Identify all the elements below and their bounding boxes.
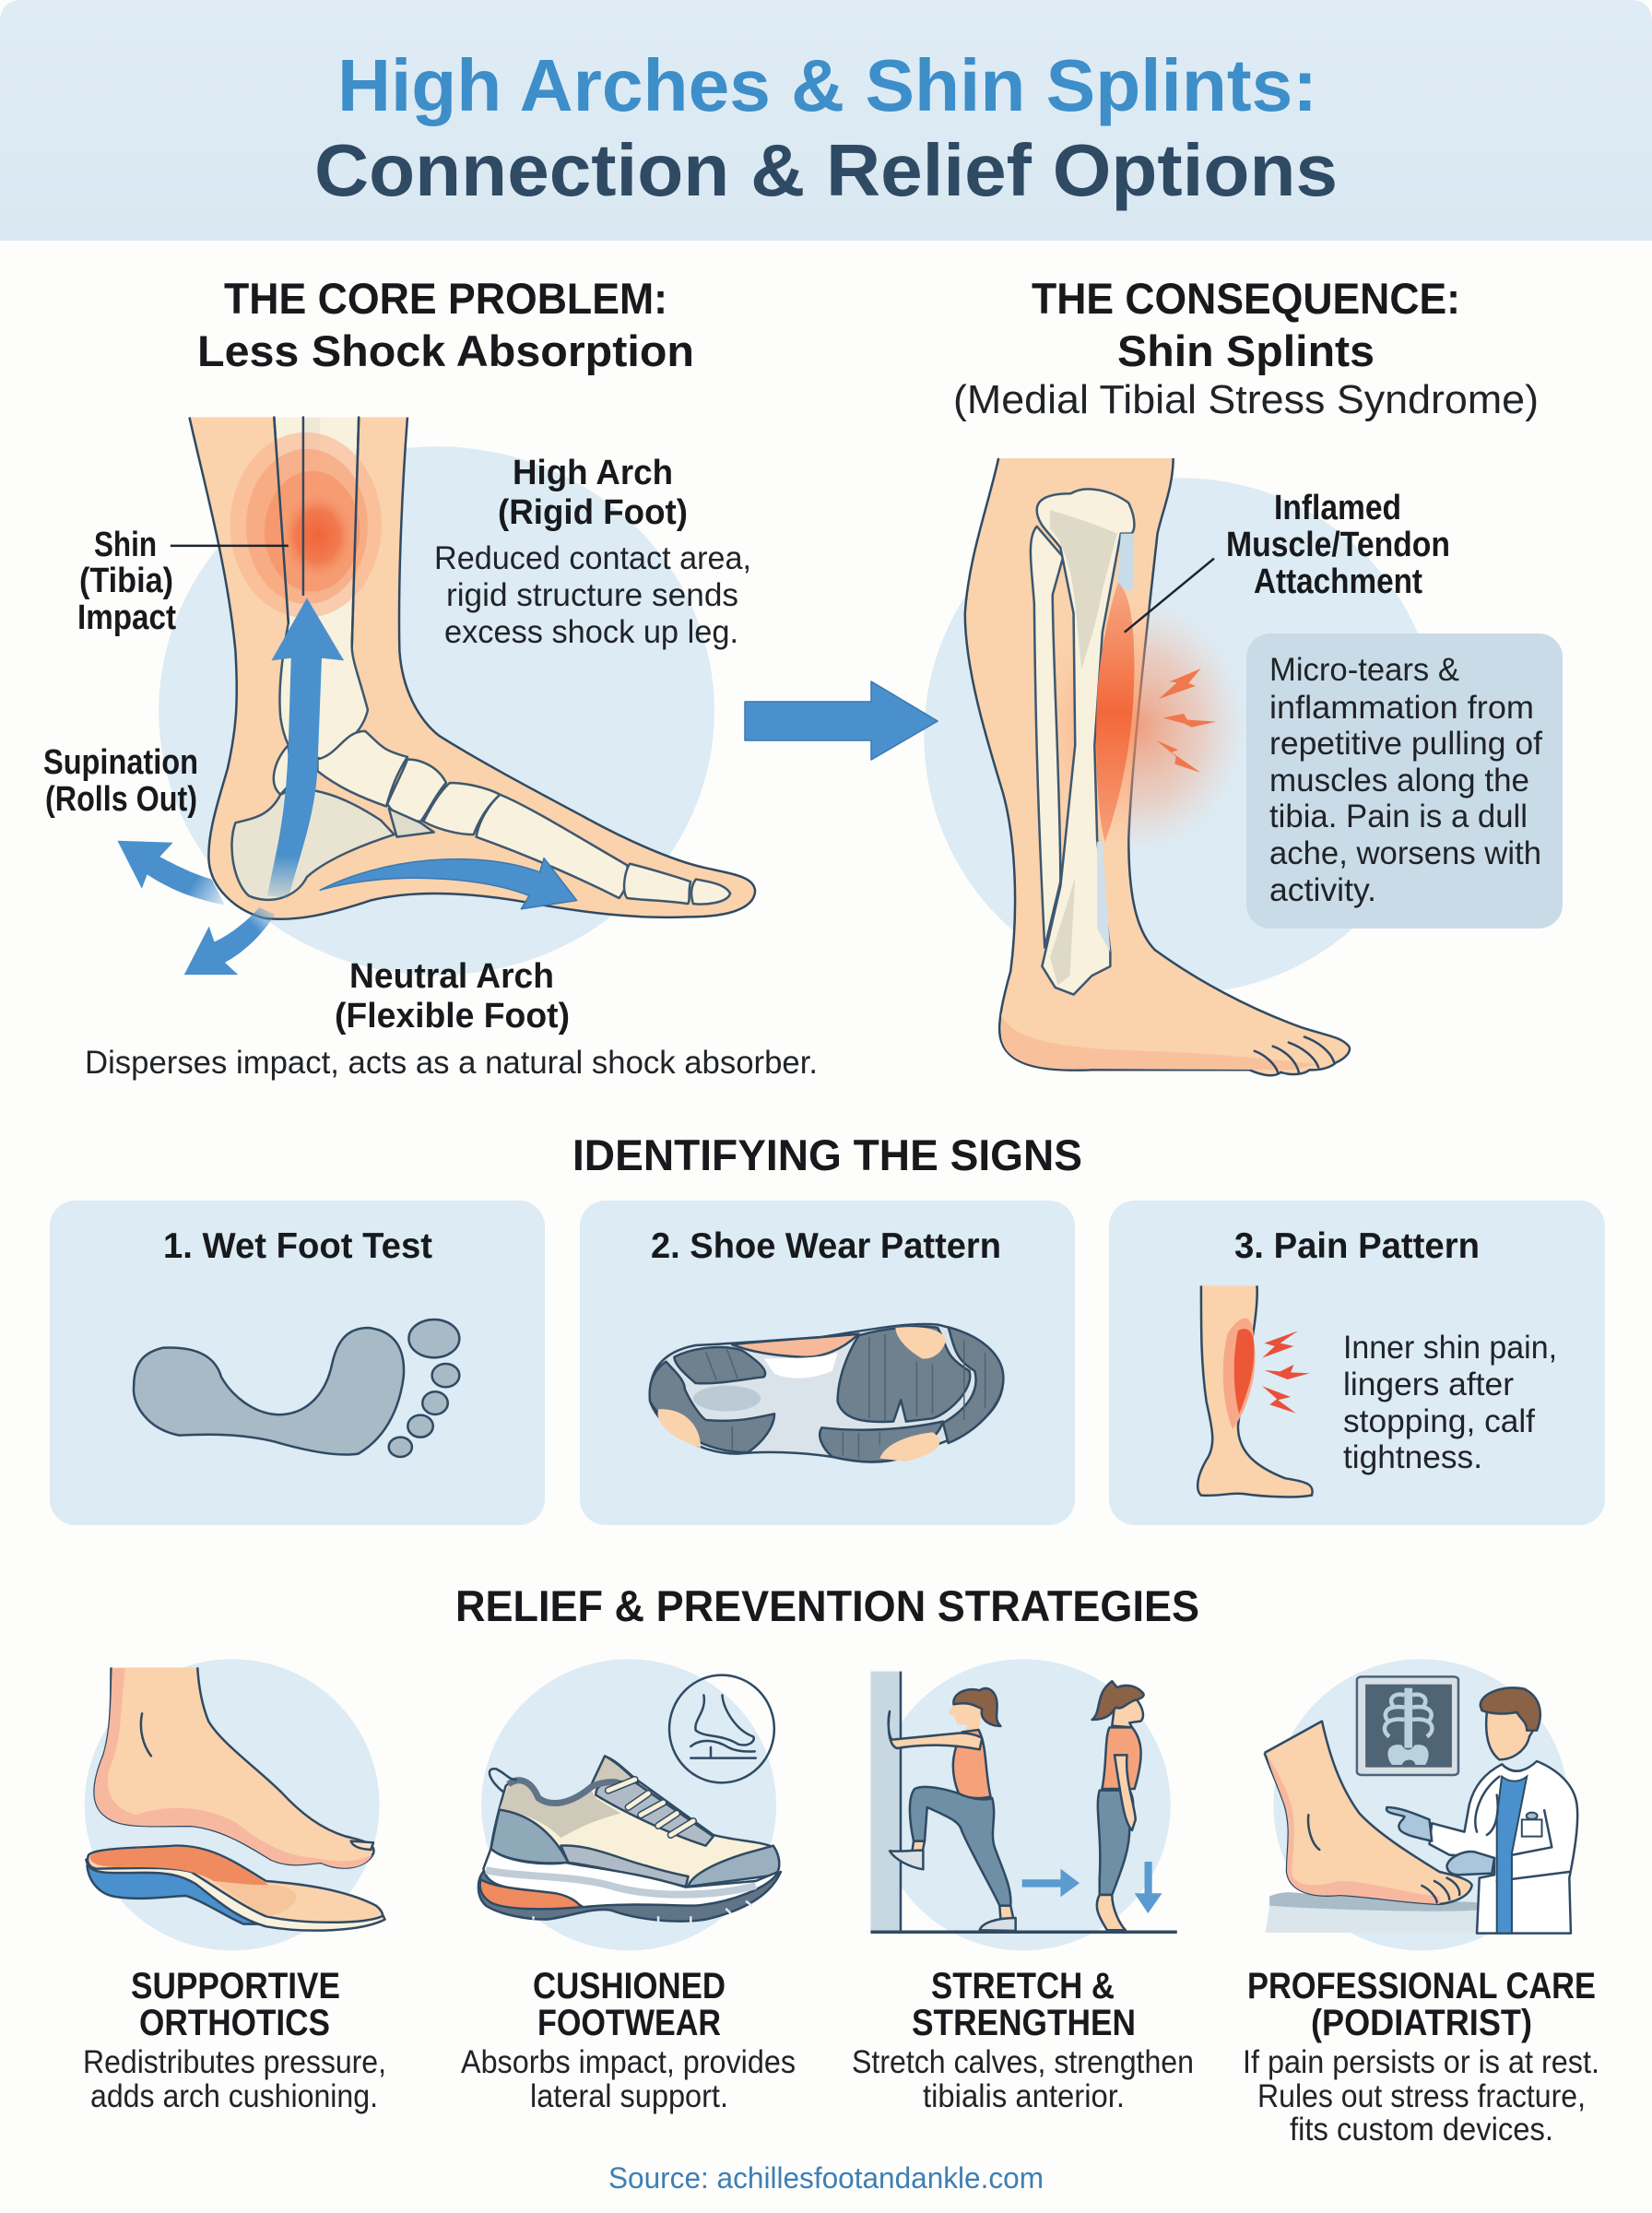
label: high arch: High Arch bbox=[513, 454, 673, 492]
exam table bbox=[1266, 1906, 1477, 1933]
tarsal and metatarsal bones bbox=[274, 745, 291, 795]
callout: micro-tears explanation: tibia. Pain is a dull bbox=[1269, 799, 1528, 834]
text: professional care: (PODIATRIST) bbox=[1311, 2003, 1532, 2043]
text: professional care: fits custom devices. bbox=[1290, 2112, 1553, 2148]
shoe upper bbox=[490, 1757, 779, 1887]
leader line: shin bbox=[171, 545, 289, 547]
callout: micro-tears explanation: Micro-tears & bbox=[1269, 652, 1459, 688]
illustration: podiatrist exam bbox=[1265, 1659, 1577, 1950]
label: neutral arch: (Flexible Foot) bbox=[335, 997, 570, 1035]
inflammation glow bbox=[1032, 599, 1246, 854]
text: cushioned footwear: lateral support. bbox=[530, 2078, 728, 2114]
callout: micro-tears explanation: activity. bbox=[1269, 872, 1376, 908]
figure: calf stretch bbox=[889, 1688, 1016, 1931]
collar rim bbox=[508, 1781, 619, 1804]
text: stretch and strengthen: tibialis anterior. bbox=[923, 2078, 1125, 2114]
text: supportive orthotics bbox=[83, 1966, 386, 2114]
impact heat zone bbox=[230, 432, 382, 618]
text: supportive orthotics: ORTHOTICS bbox=[139, 2003, 330, 2043]
label: high arch bbox=[434, 454, 751, 650]
text: supportive orthotics: adds arch cushioning. bbox=[90, 2078, 378, 2114]
callout: micro-tears explanation: ache, worsens with bbox=[1269, 835, 1541, 871]
heading: consequence: Shin Splints bbox=[1117, 326, 1375, 375]
label: high arch: excess shock up leg. bbox=[444, 614, 738, 650]
foot outline bbox=[189, 418, 755, 919]
callout: micro-tears explanation: repetitive pulling of bbox=[1269, 726, 1542, 762]
text: stretch and strengthen: STRETCH & bbox=[931, 1966, 1115, 2006]
text: stretch and strengthen bbox=[852, 1966, 1194, 2114]
label: shin impact: Shin bbox=[94, 526, 157, 564]
pain bolts bbox=[1159, 669, 1201, 699]
doctor coat bbox=[1430, 1761, 1577, 1934]
inflamed muscle bbox=[1096, 583, 1134, 842]
label: shin impact: Impact bbox=[77, 598, 176, 637]
title line 1: High Arches & Shin Splints: bbox=[337, 44, 1317, 126]
doctor scrubs bbox=[1497, 1777, 1527, 1934]
heading: consequence: THE CONSEQUENCE: bbox=[1032, 274, 1460, 323]
text: professional care: If pain persists or is at rest. bbox=[1243, 2044, 1599, 2080]
arrow: problem to consequence bbox=[745, 681, 938, 760]
doctor head bbox=[1486, 1711, 1537, 1759]
tibia and fibula bbox=[274, 418, 368, 759]
text: cushioned footwear: CUSHIONED bbox=[533, 1966, 726, 2006]
panel: pain pattern: tightness. bbox=[1343, 1439, 1482, 1475]
heading: relief and prevention: RELIEF & PREVENTION STRATEGIES bbox=[455, 1581, 1199, 1630]
text: cushioned footwear: Absorbs impact, provides bbox=[461, 2044, 796, 2080]
panel: pain pattern: lingers after bbox=[1343, 1367, 1514, 1402]
patient foot bbox=[1265, 1722, 1472, 1904]
orange heel wedge bbox=[480, 1879, 581, 1909]
laces bbox=[608, 1780, 693, 1835]
arrow: along the arch bbox=[320, 858, 577, 909]
heading: consequence bbox=[953, 274, 1539, 422]
text: professional care: Rules out stress fracture, bbox=[1257, 2078, 1586, 2114]
figure: calf raise bbox=[1092, 1681, 1144, 1930]
label: supination bbox=[43, 743, 198, 819]
label: shin impact bbox=[77, 526, 176, 637]
text: stretch and strengthen: STRENGTHEN bbox=[912, 2003, 1136, 2043]
heading: consequence: (Medial Tibial Stress Syndrome) bbox=[953, 377, 1539, 422]
text: professional care: PROFESSIONAL CARE bbox=[1247, 1966, 1596, 2006]
title line 2: Connection & Relief Options bbox=[314, 129, 1338, 211]
arrow: supination bbox=[117, 841, 225, 905]
callout: micro-tears explanation: inflammation from bbox=[1269, 690, 1534, 726]
pain description: Inner shin pain, bbox=[1343, 1330, 1557, 1366]
label: inflamed attachment: Muscle/Tendon bbox=[1226, 526, 1450, 564]
panel: shoe wear pattern bbox=[580, 1201, 1075, 1525]
shoe outsole bbox=[478, 1869, 781, 1922]
gloved hands bbox=[1386, 1807, 1432, 1841]
inset icon: arch support bbox=[669, 1675, 774, 1782]
text: supportive orthotics: SUPPORTIVE bbox=[131, 1966, 340, 2006]
label: high arch: (Rigid Foot) bbox=[498, 493, 688, 532]
leg outline bbox=[965, 458, 1350, 1075]
label: shin impact: (Tibia) bbox=[79, 562, 173, 600]
x-ray panel bbox=[1357, 1676, 1458, 1775]
text: professional care bbox=[1243, 1966, 1599, 2148]
heading: core problem bbox=[197, 274, 694, 375]
arrow: down bbox=[1135, 1862, 1162, 1913]
illustration: high arch foot anatomy bbox=[117, 418, 755, 976]
callout: micro-tears explanation bbox=[1246, 633, 1563, 929]
source line: Source: achillesfootandankle.com bbox=[608, 2161, 1044, 2195]
arrow: right bbox=[1022, 1869, 1080, 1897]
text: cushioned footwear: FOOTWEAR bbox=[537, 2003, 721, 2043]
label: inflamed attachment: Attachment bbox=[1254, 562, 1422, 601]
icon: high arch footprint bbox=[134, 1320, 459, 1457]
text: supportive orthotics: Redistributes pressure, bbox=[83, 2044, 386, 2080]
panel: wet foot test bbox=[50, 1201, 545, 1525]
label: inflamed attachment: Inflamed bbox=[1274, 489, 1401, 527]
heading: core problem: Less Shock Absorption bbox=[197, 326, 694, 375]
ground line bbox=[870, 1931, 1177, 1934]
arrow: shock up the leg bbox=[267, 598, 344, 898]
leader line: attachment bbox=[1125, 559, 1214, 633]
illustration: orthotic insole bbox=[85, 1659, 385, 1950]
heading: identifying the signs: IDENTIFYING THE SIGNS bbox=[572, 1130, 1082, 1179]
label: high arch: Reduced contact area, bbox=[434, 540, 751, 576]
label: supination: Supination bbox=[43, 743, 198, 782]
tibia bbox=[1037, 489, 1134, 995]
insole base bbox=[87, 1865, 261, 1924]
panel: shoe wear pattern: 2. Shoe Wear Pattern bbox=[651, 1226, 1001, 1266]
panel: wet foot test: 1. Wet Foot Test bbox=[163, 1226, 432, 1266]
label: neutral arch: Disperses impact, acts as a natural shock absorber. bbox=[85, 1045, 818, 1081]
illustration: cushioned shoe bbox=[478, 1659, 781, 1950]
fibula bbox=[1031, 527, 1063, 948]
illustration: shin splints leg bbox=[924, 458, 1439, 1075]
label: neutral arch bbox=[85, 957, 818, 1081]
shoe midsole bbox=[483, 1849, 778, 1907]
callout: micro-tears explanation: muscles along the bbox=[1269, 763, 1529, 799]
icon: worn shoe sole bbox=[650, 1324, 1003, 1462]
insole surface bbox=[88, 1846, 383, 1923]
label: supination: (Rolls Out) bbox=[45, 780, 197, 819]
arrow: downward dispersal bbox=[184, 907, 275, 975]
foot above insole bbox=[94, 1667, 373, 1868]
label: neutral arch: Neutral Arch bbox=[349, 957, 554, 996]
heading: core problem: THE CORE PROBLEM: bbox=[224, 274, 667, 323]
text: cushioned footwear bbox=[461, 1966, 796, 2114]
panel: pain pattern: 3. Pain Pattern bbox=[1234, 1226, 1480, 1266]
icon: small leg with pain bbox=[1198, 1285, 1313, 1497]
label: inflamed attachment bbox=[1226, 489, 1450, 601]
wall bbox=[870, 1672, 901, 1932]
header band bbox=[0, 0, 1652, 241]
illustration: stretching woman bbox=[870, 1659, 1177, 1950]
text: stretch and strengthen: Stretch calves, strengthen bbox=[852, 2044, 1194, 2080]
stethoscope and badge bbox=[1475, 1777, 1499, 1835]
label: high arch: rigid structure sends bbox=[446, 577, 738, 613]
panel: pain pattern bbox=[1109, 1201, 1605, 1525]
panel: pain pattern: stopping, calf bbox=[1343, 1403, 1535, 1439]
